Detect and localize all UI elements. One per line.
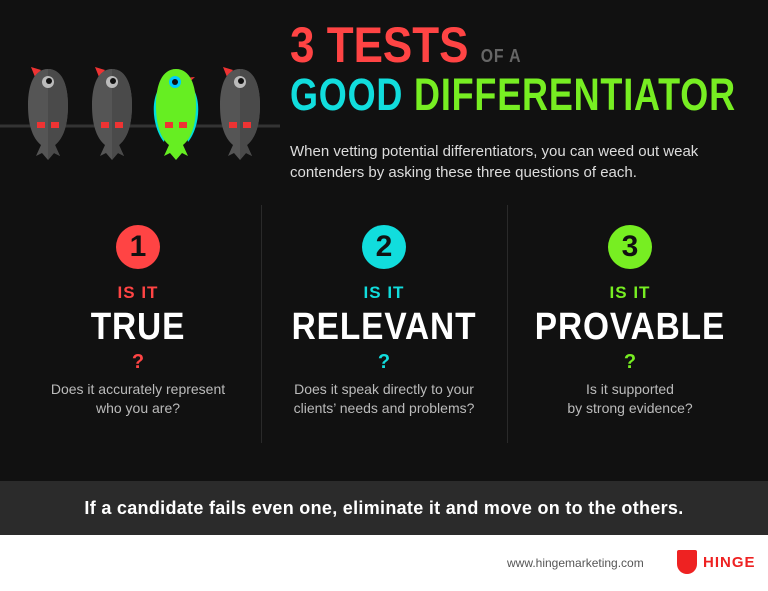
column: true: ? (132, 351, 144, 373)
column: relevant: ? (378, 351, 390, 373)
logo (677, 550, 756, 574)
bottom banner (0, 481, 768, 535)
column: relevant: 2 (376, 230, 392, 263)
title: GOOD DIFFERENTIATOR (290, 69, 736, 120)
title (290, 17, 736, 120)
column: relevant: RELEVANT (292, 306, 476, 348)
column: true: TRUE (91, 306, 185, 348)
column: true: who you are? (96, 400, 180, 416)
column: true: 1 (130, 230, 146, 263)
birds illustration (0, 67, 280, 160)
column: relevant: Does it speak directly to your (294, 381, 474, 397)
column: provable: by strong evidence? (567, 400, 693, 416)
dividers (261, 205, 262, 443)
website: www.hingemarketing.com (507, 556, 644, 570)
column: provable: PROVABLE (535, 306, 725, 348)
column: relevant (292, 225, 476, 416)
column: provable: ? (624, 351, 636, 373)
column: provable: 3 (622, 230, 638, 263)
footer (0, 535, 768, 591)
bottom banner: If a candidate fails even one, eliminate it and move on to the others. (84, 498, 684, 518)
column: true (51, 225, 226, 416)
column: relevant: clients’ needs and problems? (294, 400, 474, 416)
column: provable: Is it supported (586, 381, 674, 397)
logo: HINGE (703, 554, 756, 571)
column: relevant: IS IT (364, 283, 404, 302)
column: true: IS IT (118, 283, 158, 302)
column: provable: IS IT (610, 283, 650, 302)
title: 3 TESTS OF A (290, 17, 521, 73)
column: provable (535, 225, 725, 416)
column: true: Does it accurately represent (51, 381, 225, 397)
intro text: When vetting potential differentiators, you can weed out weak contenders by asking these three questions of each. (290, 143, 698, 181)
